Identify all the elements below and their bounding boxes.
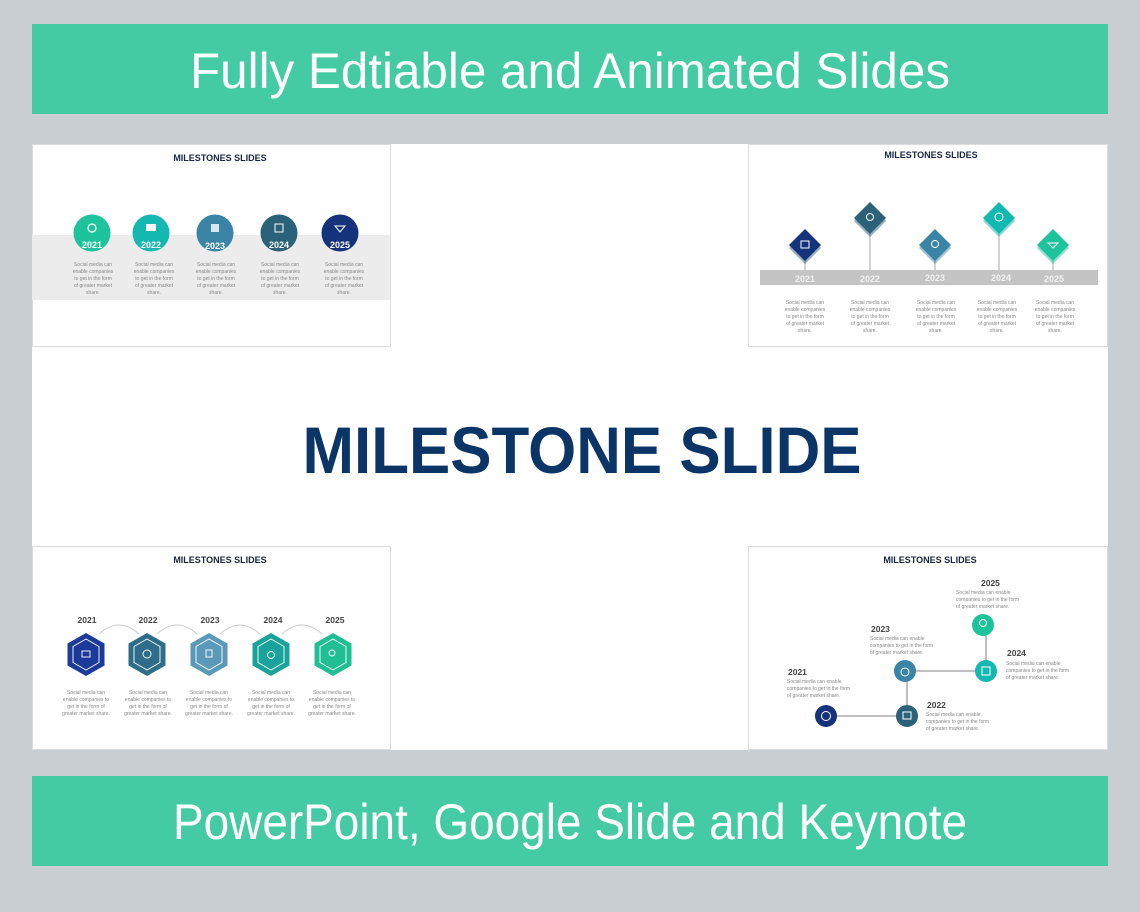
circle items: 2021 (82, 240, 102, 250)
circle items (74, 214, 358, 252)
panel: hexagon timeline: 2024 (264, 615, 283, 625)
panel: step path: 2021 (788, 667, 807, 677)
diamonds (789, 202, 1069, 264)
panel: diamond timeline: 2023 (925, 273, 945, 283)
step circles (815, 614, 997, 727)
white content area (32, 144, 1108, 750)
panel: diamond timeline (748, 144, 1108, 346)
panel: step path: 2023 (871, 624, 890, 634)
main title: MILESTONE SLIDE (302, 413, 862, 487)
panel: hexagon timeline: 2022 (139, 615, 158, 625)
panel: circles timeline: MILESTONES SLIDES (173, 153, 267, 163)
panel: hexagon timeline (32, 546, 390, 750)
panel: hexagon timeline: MILESTONES SLIDES (173, 555, 267, 565)
circle items: 2025 (330, 240, 350, 250)
panel: step path: 2024 (1007, 648, 1026, 658)
panel: step path (748, 546, 1108, 750)
panel: diamond timeline: 2025 (1044, 274, 1064, 284)
circle items: 2022 (141, 240, 161, 250)
bottom banner (32, 776, 1108, 866)
hexagons (68, 633, 352, 676)
panel: diamond timeline: MILESTONES SLIDES (884, 150, 978, 160)
panel: circles timeline (32, 144, 390, 346)
panel: step path: 2025 (981, 578, 1000, 588)
panel: step path: MILESTONES SLIDES (883, 555, 977, 565)
top banner (32, 24, 1108, 114)
circle items: 2024 (269, 240, 289, 250)
panel: diamond timeline: 2024 (991, 273, 1011, 283)
panel: hexagon timeline: 2025 (326, 615, 345, 625)
panel: step path: 2022 (927, 700, 946, 710)
panel: diamond timeline: 2022 (860, 274, 880, 284)
circle items: 2023 (205, 241, 225, 251)
panel: hexagon timeline: 2021 (78, 615, 97, 625)
panel: diamond timeline: 2021 (795, 274, 815, 284)
panel: hexagon timeline: 2023 (201, 615, 220, 625)
top banner: Fully Edtiable and Animated Slides (190, 43, 950, 99)
bottom banner: PowerPoint, Google Slide and Keynote (173, 794, 967, 850)
